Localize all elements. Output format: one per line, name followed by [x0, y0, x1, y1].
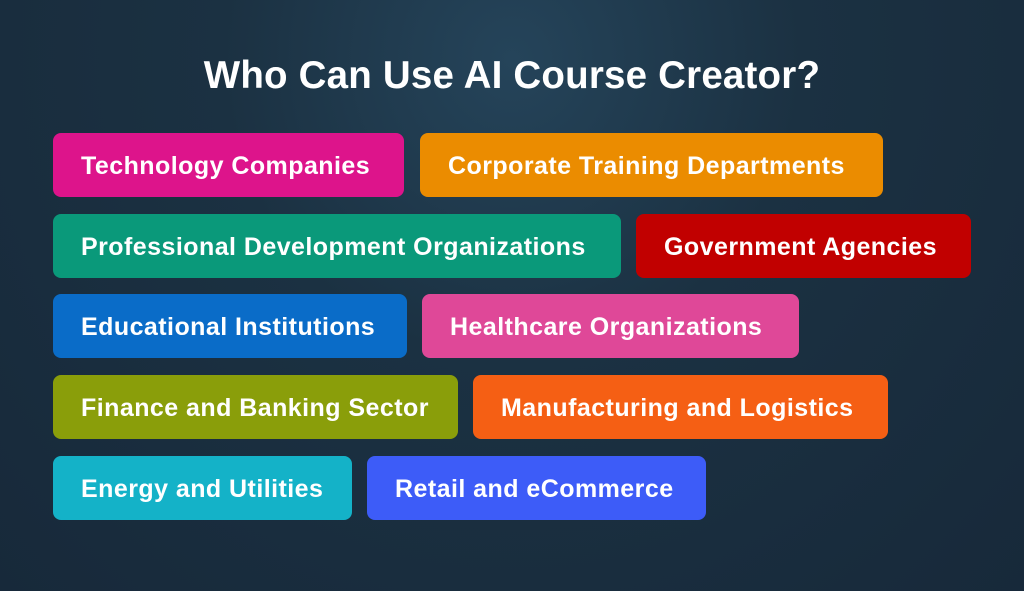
- tag: Manufacturing and Logistics: [473, 375, 888, 439]
- tag: Finance and Banking Sector: Finance and Banking Sector: [81, 394, 429, 422]
- tag: Healthcare Organizations: Healthcare Organizations: [450, 313, 762, 341]
- tag: Government Agencies: Government Agencies: [664, 233, 937, 261]
- tag: Manufacturing and Logistics: Manufacturing and Logistics: [501, 394, 853, 422]
- tag: Government Agencies: [636, 214, 971, 278]
- tag: Professional Development Organizations: [53, 214, 621, 278]
- tag: Energy and Utilities: Energy and Utilities: [81, 475, 323, 503]
- tag: Energy and Utilities: [53, 456, 352, 520]
- tag: Healthcare Organizations: [422, 294, 799, 358]
- tag: Educational Institutions: Educational Institutions: [81, 313, 375, 341]
- tag: Corporate Training Departments: [420, 133, 883, 197]
- tag: Educational Institutions: [53, 294, 407, 358]
- tag: Professional Development Organizations: Professional Development Organizations: [81, 233, 586, 261]
- tag: Corporate Training Departments: Corporate Training Departments: [448, 152, 845, 180]
- tag: Technology Companies: [53, 133, 404, 197]
- tag: Finance and Banking Sector: [53, 375, 458, 439]
- tag: Retail and eCommerce: [367, 456, 706, 520]
- tag: Technology Companies: Technology Companies: [81, 152, 370, 180]
- title: Who Can Use AI Course Creator?: [204, 54, 820, 97]
- tag: Retail and eCommerce: Retail and eCommerce: [395, 475, 674, 503]
